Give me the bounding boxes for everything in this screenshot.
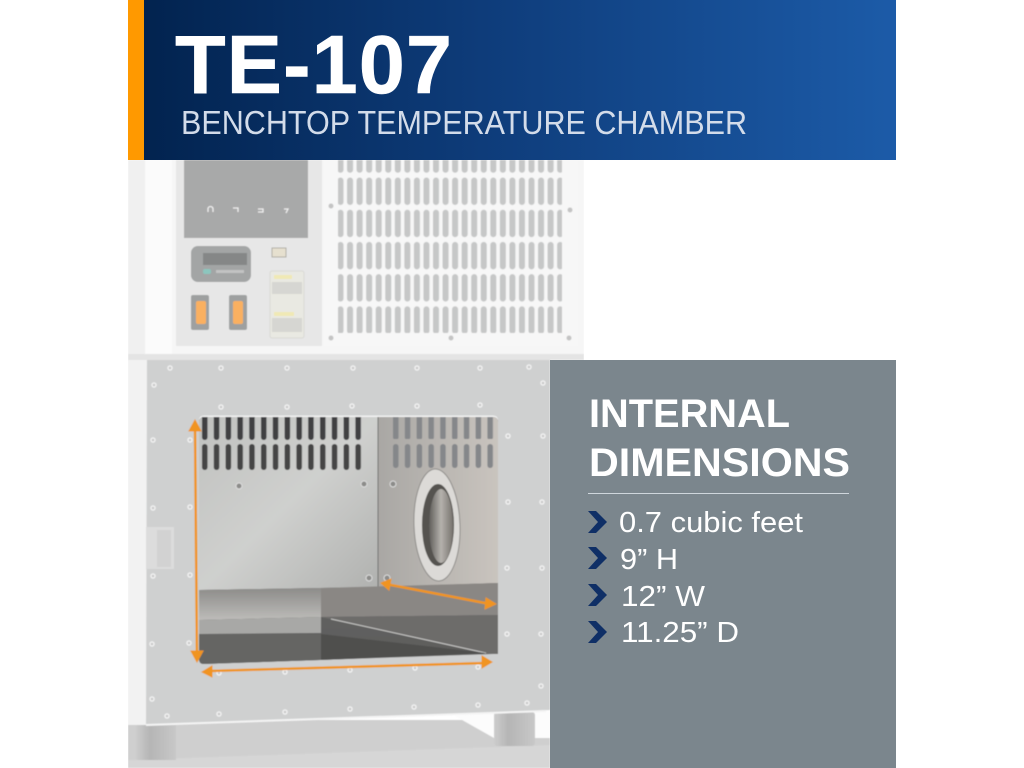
heading: INTERNAL bbox=[589, 392, 790, 436]
height: 9” H bbox=[620, 544, 678, 576]
floor bbox=[199, 634, 321, 664]
title: TE-107 bbox=[175, 18, 453, 111]
volume: 0.7 cubic feet bbox=[619, 507, 803, 539]
subtitle: BENCHTOP TEMPERATURE CHAMBER bbox=[181, 104, 747, 141]
header banner bbox=[128, 0, 896, 160]
door frame side bbox=[128, 360, 147, 725]
left back panel bbox=[199, 417, 378, 590]
control panel bbox=[176, 160, 322, 346]
orange accent bar bbox=[128, 0, 144, 160]
left vents bbox=[200, 417, 365, 440]
right ledge bbox=[321, 583, 498, 617]
chamber photo bbox=[128, 160, 584, 768]
heading bbox=[589, 392, 850, 485]
panel background bbox=[550, 360, 896, 768]
upper control housing bbox=[128, 160, 584, 360]
warning label bbox=[270, 271, 304, 338]
door plate bbox=[146, 360, 550, 726]
right wall panel bbox=[378, 417, 498, 587]
display screen bbox=[184, 160, 308, 238]
screen icons bbox=[208, 206, 288, 213]
left ledge bbox=[199, 588, 321, 620]
latch bbox=[146, 527, 174, 569]
round window bbox=[412, 468, 462, 582]
right foot bbox=[494, 712, 535, 746]
height arrow bbox=[189, 420, 203, 662]
stand base bbox=[128, 708, 550, 768]
depth: 11.25” D bbox=[621, 617, 739, 649]
bullet 2 bbox=[588, 547, 607, 569]
left foot bbox=[136, 722, 176, 760]
depth arrow bbox=[381, 579, 496, 609]
heading: DIMENSIONS bbox=[589, 441, 850, 485]
power switch bbox=[191, 295, 209, 330]
chamber opening bbox=[199, 416, 498, 664]
bullet 4 bbox=[588, 621, 607, 643]
blue gradient band bbox=[144, 0, 896, 160]
right vents bbox=[391, 417, 498, 439]
divider bbox=[588, 493, 849, 494]
rivets bbox=[150, 365, 545, 718]
list: dimensions bbox=[588, 507, 803, 649]
width: 12” W bbox=[621, 581, 706, 613]
vent grille bbox=[323, 160, 579, 347]
usb port bbox=[272, 248, 286, 257]
digital controller bbox=[191, 246, 251, 282]
panel screws bbox=[236, 481, 396, 581]
panel: internal dimensions bbox=[550, 360, 896, 768]
bullet 1 bbox=[588, 511, 607, 533]
width arrow bbox=[202, 656, 492, 677]
bullet 3 bbox=[588, 584, 607, 606]
heat switch bbox=[229, 295, 247, 330]
